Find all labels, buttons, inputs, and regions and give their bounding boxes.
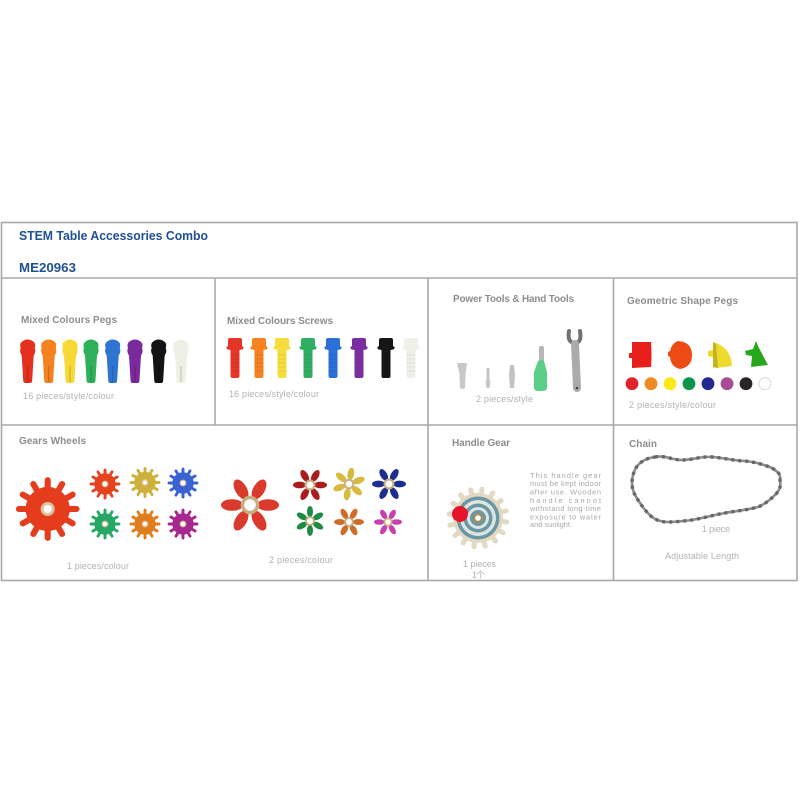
panel: mixed colours screws	[226, 316, 420, 399]
panel frame and grid	[2, 222, 797, 581]
heading: tools: Power Tools & Hand Tools	[453, 294, 574, 305]
caption: chain length: Adjustable Length	[665, 551, 739, 561]
care note	[529, 471, 602, 529]
caption: tools: 2 pieces/style	[476, 394, 533, 404]
care note: after use. Wooden	[530, 488, 601, 496]
care note: exposure to water	[530, 512, 602, 522]
caption: chinese quantity: 1个	[472, 570, 485, 580]
heading: handle gear: Handle Gear	[452, 438, 510, 449]
caption: screws: 16 pieces/style/colour	[229, 389, 319, 399]
heading: geometric: Geometric Shape Pegs	[627, 296, 738, 307]
icon: orange round peg	[668, 341, 692, 369]
six-arm gears	[221, 463, 406, 541]
icon: yellow sector peg	[708, 342, 732, 368]
caption: geometric: 2 pieces/style/colour	[629, 400, 716, 410]
panel: power tools and hand tools	[453, 294, 580, 404]
care note: This handle gear	[530, 471, 602, 480]
care note: must be kept indoor	[530, 479, 602, 488]
caption: handle gear: 1 pieces	[463, 559, 496, 569]
icon: red square peg	[629, 342, 652, 368]
care note: and sunlight.	[530, 520, 572, 529]
panel: mixed colours pegs	[20, 315, 189, 401]
care note: handle cannot	[530, 496, 601, 505]
icon: thin bit	[486, 368, 490, 388]
panel: handle gear	[445, 438, 602, 580]
heading: chain: Chain	[629, 439, 657, 450]
icon: wrench	[569, 331, 580, 389]
care note: withstand long-time	[529, 504, 601, 513]
icon: medium bit	[509, 365, 515, 388]
screws row	[226, 338, 420, 378]
icon: green triangle peg	[745, 341, 768, 367]
title: STEM Table Accessories Combo	[19, 228, 208, 243]
product code: ME20963	[19, 260, 76, 275]
colour swatches	[626, 377, 771, 390]
title block	[19, 228, 208, 275]
pegs row	[20, 340, 189, 383]
panel: gears wheels	[19, 436, 406, 571]
panel: chain	[629, 439, 780, 561]
toothed gears	[19, 469, 197, 538]
caption: pegs: 16 pieces/style/colour	[23, 391, 114, 401]
heading: gears: Gears Wheels	[19, 436, 86, 447]
icon: wide bit	[457, 363, 467, 389]
heading: pegs: Mixed Colours Pegs	[21, 315, 117, 326]
heading: screws: Mixed Colours Screws	[227, 316, 333, 327]
caption: six-arm gears: 2 pieces/colour	[269, 555, 333, 565]
icon: chain loop	[632, 457, 780, 522]
caption: chain quantity: 1 piece	[702, 524, 730, 534]
icon: screwdriver	[534, 346, 547, 391]
icon: handle gear	[445, 485, 511, 551]
panel: geometric shape pegs	[626, 296, 771, 410]
caption: toothed gears: 1 pieces/colour	[67, 561, 129, 571]
